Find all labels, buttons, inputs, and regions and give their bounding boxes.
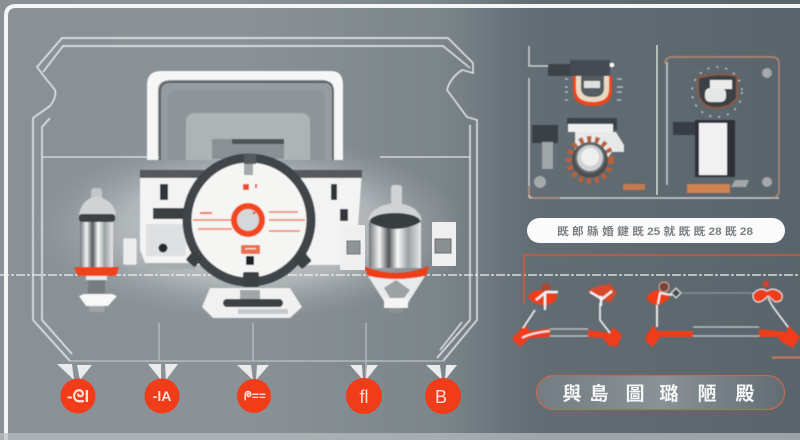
- central light glow: [35, 136, 465, 320]
- legend glyphs: 殿: [735, 384, 755, 405]
- marker 1: [57, 364, 96, 414]
- orange label bar: [687, 184, 730, 193]
- marker 1: -ᘓl: [67, 387, 89, 406]
- legend glyphs: 島: [589, 383, 609, 405]
- outer schematic frame: [33, 38, 477, 361]
- dial center knob: [234, 206, 262, 234]
- dial small indicators: [200, 184, 257, 214]
- legend glyphs: 與: [562, 383, 582, 405]
- mount screw left: [534, 176, 546, 188]
- lower pill legend: [536, 376, 784, 410]
- marker 5: B: [435, 387, 447, 407]
- legend glyphs: 陋: [697, 383, 717, 405]
- legend glyphs: [562, 383, 755, 405]
- machine base: [202, 288, 302, 318]
- legend glyphs: 璐: [659, 383, 679, 405]
- dial ring: [187, 158, 311, 282]
- panel frame lines: [529, 46, 779, 198]
- machine shoulders: [140, 170, 362, 269]
- marker 3: ᖘ==: [244, 389, 266, 403]
- copper corner: [529, 186, 560, 198]
- ring assembly icon: [692, 67, 742, 117]
- marker 4: fl: [360, 387, 368, 407]
- machine arch housing: [147, 71, 343, 160]
- mount screw bottom: [762, 177, 772, 187]
- marker 2: [144, 364, 180, 414]
- left small canister: [123, 238, 137, 265]
- dial lower label: [241, 245, 260, 265]
- marker 4: [346, 365, 382, 414]
- dial tab: [244, 164, 253, 175]
- left cylinder: [74, 188, 119, 312]
- frame horizontal line: [43, 156, 470, 158]
- linkage right: [645, 280, 800, 348]
- inner side line: [666, 62, 668, 185]
- right control boxes: [340, 222, 456, 270]
- vertical panel divider: [656, 45, 658, 195]
- motor housing: [567, 118, 624, 168]
- orange streak accent: [772, 356, 800, 359]
- dial orange lines: [193, 212, 305, 231]
- legend glyphs: 圖: [625, 384, 645, 405]
- dark connector: [673, 122, 697, 135]
- white cartridge: [695, 120, 735, 177]
- marker 5: [425, 365, 461, 414]
- U magnet icon: [548, 60, 614, 106]
- right cylinder: [364, 185, 429, 313]
- magnet tick marks: [565, 79, 623, 100]
- linkage left: [513, 283, 622, 347]
- bottom edge strip: [0, 433, 800, 440]
- orange tag: [623, 184, 645, 190]
- orange frame: [524, 255, 800, 303]
- central machine: [140, 71, 362, 318]
- white text bar: 既 郎 縣 婚 鍵 既 25 就 既 既 28 既 28: [557, 224, 753, 238]
- ring brackets: [186, 154, 312, 287]
- panel: upper left component diagram: [529, 46, 779, 198]
- copper frame: [665, 57, 779, 198]
- motor connector block: [532, 125, 558, 169]
- horizontal dashed axis: [0, 274, 800, 276]
- callout connector lines: [70, 323, 443, 380]
- panel: upper right component diagram: [665, 57, 779, 198]
- marker 3: [237, 365, 271, 413]
- panel: orange linkage diagram: [513, 255, 800, 348]
- mount screw top: [762, 68, 772, 78]
- white text bar: [527, 218, 785, 243]
- marker 2: -lA: [153, 388, 171, 404]
- grey tag: [731, 180, 749, 187]
- gear icon: [569, 139, 611, 181]
